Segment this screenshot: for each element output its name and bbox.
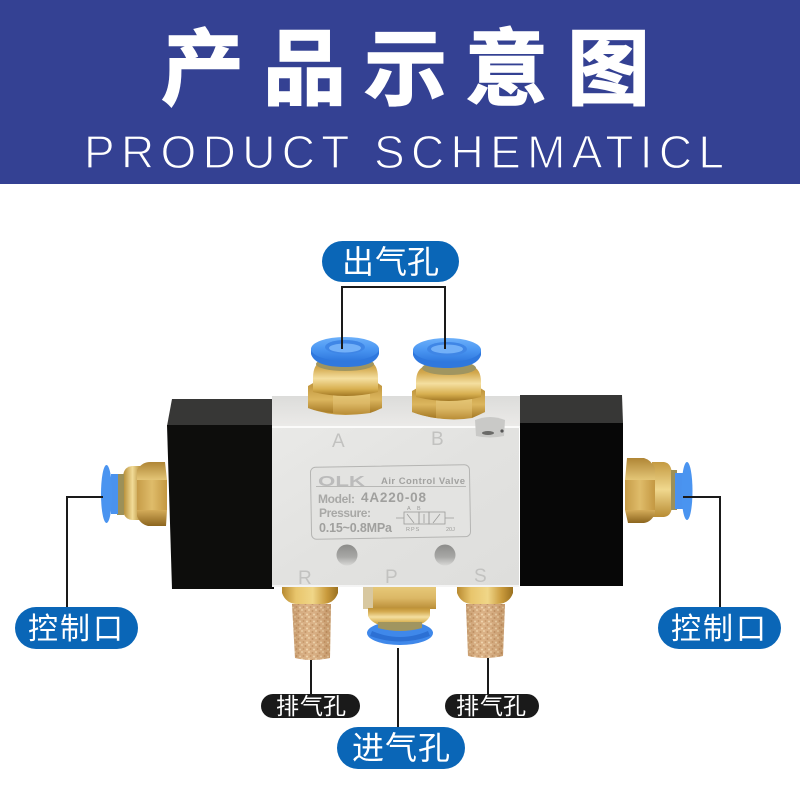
- pneumatic symbol: [396, 512, 454, 524]
- silencer R: [282, 587, 338, 660]
- nameplate: 4A220-08: [361, 490, 426, 505]
- left control fitting: [101, 462, 167, 526]
- mounting screw: [475, 417, 505, 438]
- nameplate: A: [407, 506, 411, 512]
- nameplate: Air Control Valve: [381, 476, 465, 487]
- fitting B: [412, 338, 485, 420]
- inlet fitting P: [363, 587, 436, 645]
- nameplate: 0.15~0.8MPa: [319, 521, 393, 535]
- nameplate: [310, 465, 471, 539]
- mounting holes: [336, 544, 456, 566]
- nameplate: 20J: [446, 527, 455, 533]
- nameplate: RPS: [406, 527, 420, 533]
- nameplate: B: [417, 506, 421, 512]
- port letters: B: [431, 429, 444, 450]
- label: left exhaust: 排气孔: [276, 687, 346, 721]
- title: 产品示意图: [161, 2, 650, 122]
- label: inlet port: 进气孔: [352, 723, 450, 769]
- nameplate: Pressure:: [319, 506, 371, 520]
- port letters: P: [385, 567, 398, 588]
- subtitle: PRODUCT SCHEMATICL: [84, 126, 724, 178]
- port letters: [298, 429, 487, 589]
- left black pilot block: [167, 399, 275, 589]
- label: left control port: 控制口: [28, 604, 123, 648]
- right control fitting: [625, 458, 692, 523]
- port letters: R: [298, 568, 312, 589]
- header banner: [0, 0, 800, 184]
- callout lines: [67, 287, 720, 727]
- port letters: S: [474, 566, 487, 587]
- right black pilot block: [520, 395, 623, 586]
- label: right control port: 控制口: [671, 604, 766, 648]
- nameplate: Model:: [318, 492, 355, 506]
- silver body: [272, 396, 520, 587]
- nameplate: OLK: [318, 473, 365, 490]
- fitting A: [308, 337, 382, 415]
- valve body: [167, 395, 623, 589]
- label: right exhaust: 排气孔: [456, 687, 526, 721]
- port letters: A: [332, 431, 345, 452]
- silencer S: [457, 587, 513, 658]
- label: outlet ports: 出气孔: [342, 237, 439, 283]
